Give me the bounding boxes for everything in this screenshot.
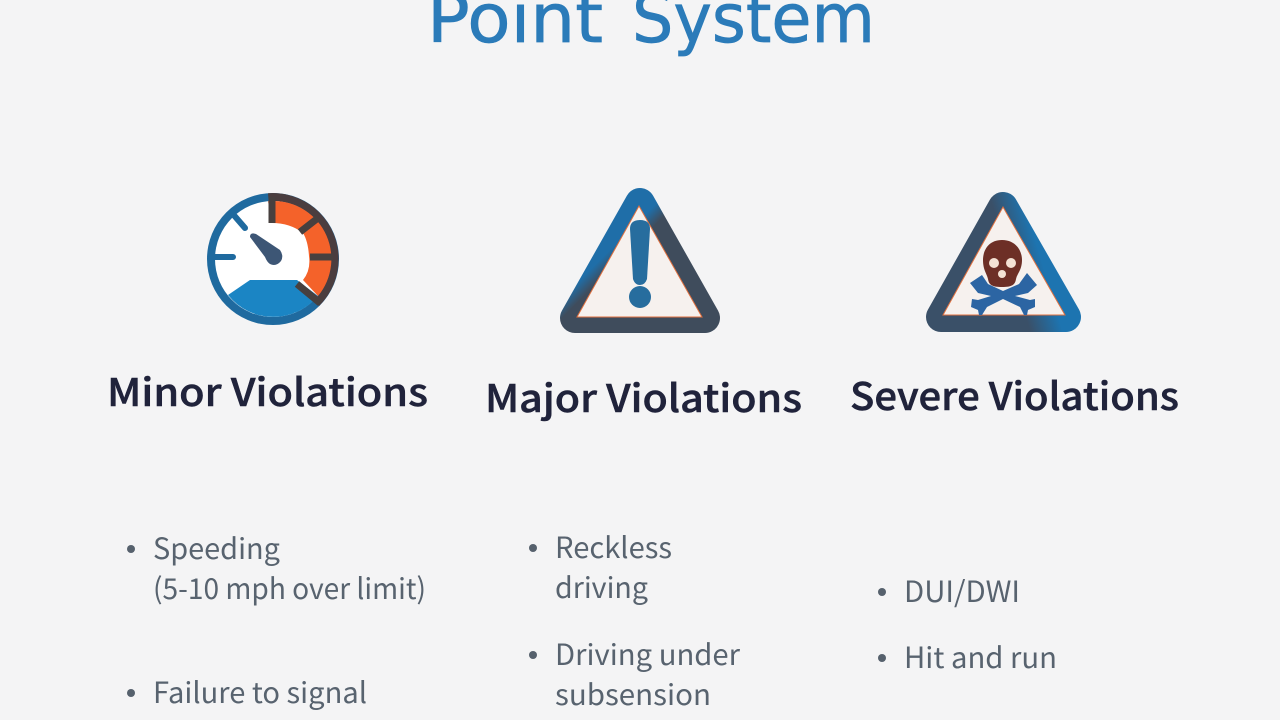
icon: speedometer: [207, 193, 339, 325]
list: minor violations: Failure to signal: [153, 670, 367, 712]
list: severe violations: [878, 569, 1057, 677]
list: major violations: driving: [555, 565, 648, 607]
column: severe violations: [850, 207, 1179, 677]
icon: skull warning triangle: [941, 207, 1066, 317]
list: major violations: subsension: [555, 672, 711, 714]
list: minor violations: (5-10 mph over limit): [153, 566, 426, 608]
title: [427, 0, 875, 59]
list: severe violations: Hit and run: [904, 635, 1057, 677]
column: minor violations: [107, 193, 428, 712]
list: major violations: [529, 525, 741, 714]
heading: major violations: Major Violations: [485, 368, 802, 423]
column: major violations: [485, 203, 802, 714]
heading: minor violations: Minor Violations: [107, 362, 428, 417]
heading: severe violations: Severe Violations: [850, 366, 1179, 421]
list: minor violations: Speeding: [153, 526, 280, 568]
list: major violations: Driving under: [555, 632, 741, 674]
icon: warning triangle: [575, 203, 705, 318]
list: major violations: Reckless: [555, 525, 672, 567]
list: severe violations: DUI/DWI: [904, 569, 1020, 611]
list: minor violations: [127, 526, 426, 712]
